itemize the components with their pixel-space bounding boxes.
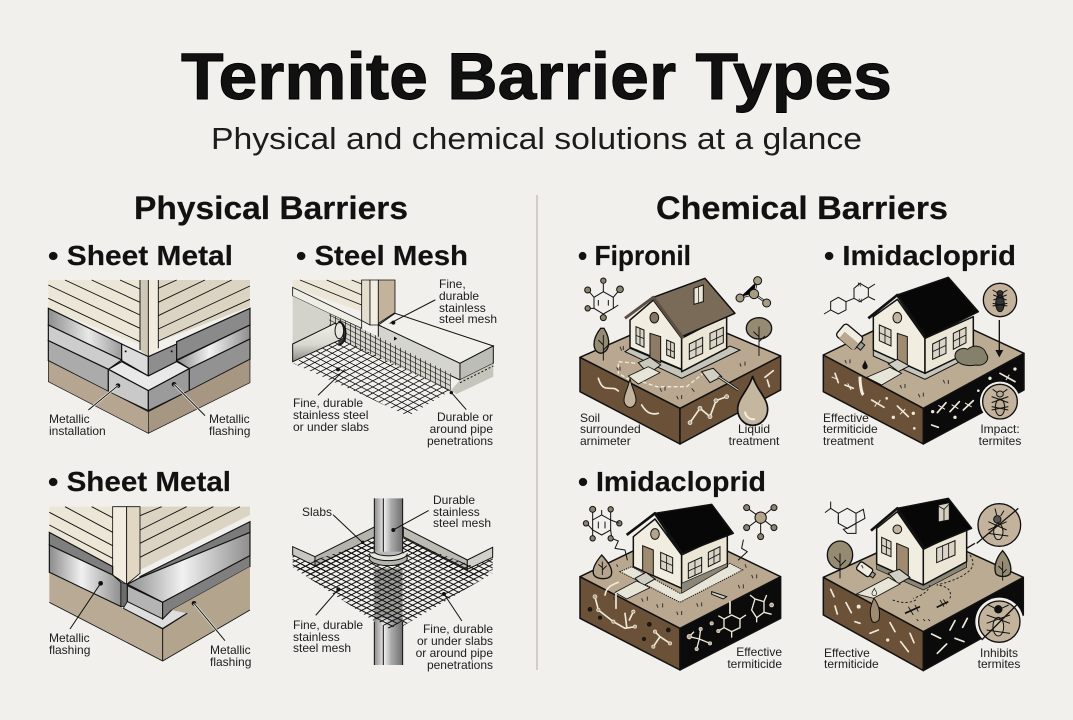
diagram: steel mesh at slab (293, 280, 493, 416)
heading: sheet metal: • Sheet Metal (48, 466, 231, 497)
label: fine durable or under slabs: or around pipe (416, 646, 493, 660)
label: fine durable under slabs: Fine, durable (293, 396, 363, 410)
illustration: house with bottle treatment and termites (823, 277, 1024, 444)
illustration: house with termite trails and prohibition icons (823, 498, 1023, 671)
heading: imidacloprid: • Imidacloprid (578, 466, 766, 497)
label: soil surrounded arnimeter: surrounded (580, 422, 641, 436)
illustration: house with bottle treatment and termites: N (858, 298, 862, 304)
label: metallic flashing: Metallic (210, 643, 251, 657)
panel: sheet metal top (48, 240, 250, 438)
label: durable around pipe penetrations: around pipe (430, 422, 493, 436)
label: fine durable stainless steel mesh: steel mesh (439, 312, 497, 326)
label: inhibits termites: Inhibits (980, 646, 1018, 660)
panel: imidacloprid bottom (578, 466, 782, 671)
label: inhibits termites: termites (978, 657, 1020, 671)
heading: steel mesh: • Steel Mesh (296, 240, 468, 271)
label: durable stainless steel mesh: Durable (433, 493, 475, 507)
label: effective termiticide: Effective (736, 645, 782, 659)
panel: steel mesh bottom (293, 493, 493, 672)
label: fine durable stainless steel mesh: durable (439, 289, 479, 303)
label: soil surrounded arnimeter: arnimeter (580, 434, 631, 448)
panel: sheet metal bottom (48, 466, 251, 669)
label: impact termites: termites (979, 434, 1021, 448)
heading: chemical barriers: Chemical Barriers (656, 190, 948, 226)
label: soil surrounded arnimeter: Soil (580, 411, 600, 425)
label: durable stainless steel mesh: steel mesh (433, 516, 491, 530)
label: metallic installation: installation (49, 424, 106, 438)
label: slabs: Slabs (302, 505, 332, 519)
label: fine durable stainless steel mesh: Fine, (439, 277, 466, 291)
heading: physical barriers: Physical Barriers (134, 190, 408, 226)
label: effective termiticide treatment: termiticide (823, 422, 878, 436)
illustration: house with treated perimeter and molecules (580, 504, 781, 670)
label: fine durable under slabs: stainless steel (293, 408, 368, 422)
label: metallic flashing: flashing (209, 424, 250, 438)
label: liquid treatment: Liquid (738, 422, 770, 436)
diagram: metal flashing corner (48, 280, 250, 433)
label: metallic flashing: flashing (49, 643, 90, 657)
label: fine durable stainless steel mesh: stainless (439, 301, 486, 315)
label: metallic installation: Metallic (49, 412, 90, 426)
label: effective termiticide treatment: Effective (823, 411, 869, 425)
subtitle: Physical and chemical solutions at a glance (211, 121, 862, 156)
label: durable stainless steel mesh: stainless (433, 505, 480, 519)
diagram: metal flashing on base (49, 507, 250, 661)
heading: fipronil: • Fipronil (578, 240, 691, 271)
heading: sheet metal: • Sheet Metal (48, 240, 233, 271)
panel: steel mesh top (293, 240, 497, 448)
label: fine durable or under slabs: or under slabs (417, 634, 493, 648)
panel: imidacloprid top (823, 240, 1024, 448)
label: effective termiticide: Effective (824, 646, 870, 660)
label: fine durable or under slabs: penetrations (427, 658, 493, 672)
label: metallic flashing: flashing (210, 655, 251, 669)
panel: inhibits termites (823, 498, 1023, 671)
label: effective termiticide: termiticide (824, 657, 879, 671)
illustration: house on soil block with liquid treatment (580, 277, 781, 444)
panel: fipronil (578, 240, 781, 448)
label: metallic flashing: Metallic (209, 412, 250, 426)
label: liquid treatment: treatment (729, 434, 780, 448)
label: effective termiticide: termiticide (727, 657, 782, 671)
label: durable around pipe penetrations: penetrations (427, 434, 493, 448)
label: fine durable stainless steel mesh: Fine, durable (293, 618, 363, 632)
label: effective termiticide treatment: treatment (823, 434, 874, 448)
title: Termite Barrier Types (181, 39, 892, 113)
label: durable around pipe penetrations: Durable or (437, 410, 493, 424)
illustration: house with bottle treatment and termites: N (858, 283, 862, 289)
label: metallic flashing: Metallic (49, 631, 90, 645)
label: fine durable stainless steel mesh: stainless (293, 630, 340, 644)
label: fine durable under slabs: or under slabs (293, 420, 369, 434)
label: impact termites: Impact: (980, 422, 1020, 436)
heading: imidacloprid: • Imidacloprid (824, 240, 1016, 271)
label: fine durable stainless steel mesh: steel mesh (293, 641, 351, 655)
diagram: mesh around pipe (293, 498, 493, 665)
label: fine durable or under slabs: Fine, durable (423, 622, 493, 636)
